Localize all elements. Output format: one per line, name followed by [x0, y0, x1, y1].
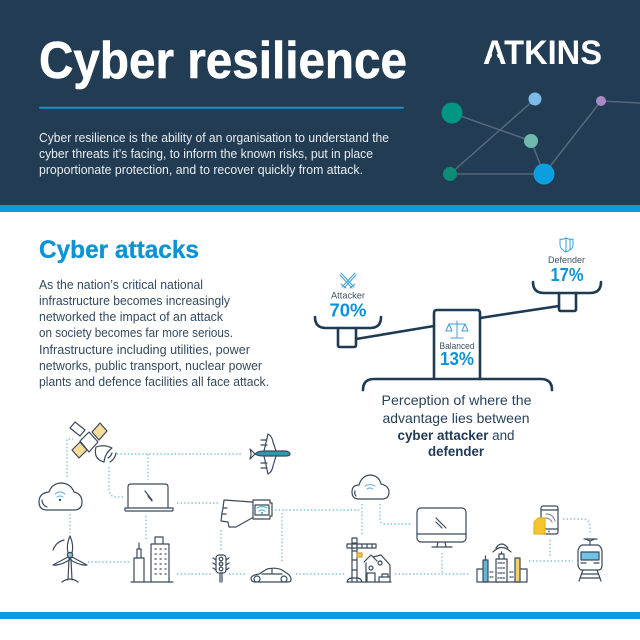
icon: traffic light	[213, 555, 229, 582]
icon: crane and houses	[347, 538, 391, 582]
defender: shield icon	[560, 238, 573, 252]
body text	[39, 278, 269, 389]
icon: train	[578, 539, 602, 581]
balanced value	[440, 341, 474, 369]
attacker value	[330, 290, 366, 320]
dotted connectors	[67, 439, 590, 574]
body text: networks, public transport, nuclear power	[39, 359, 262, 373]
scale caption: advantage lies between	[382, 410, 530, 426]
scale caption: Perception of where the	[382, 392, 532, 408]
attacker value: 70%	[330, 300, 366, 320]
defender value: 17%	[550, 265, 584, 285]
body text: networked the impact of an attack	[39, 310, 224, 324]
intro text: cyber threats it’s facing, to inform the known risks, put in place	[39, 147, 373, 161]
icon: smart city with wifi	[477, 544, 527, 582]
body text: As the nation’s critical national	[39, 278, 203, 292]
network diagram	[39, 422, 602, 582]
heading: Cyber attacks: Cyber attacks	[39, 236, 199, 264]
body text: on society becomes far more serious.	[39, 326, 233, 340]
defender value: Defender	[548, 255, 585, 266]
icon: city towers	[131, 537, 173, 582]
title: Cyber resilience	[39, 32, 407, 90]
body text: plants and defence facilities all face attack.	[39, 375, 269, 389]
balanced: scales icon	[446, 321, 468, 338]
balanced value: 13%	[440, 349, 474, 369]
icon: wind turbine	[53, 536, 87, 582]
panel: header	[0, 0, 640, 212]
icon: satellite	[70, 422, 116, 462]
balanced value: Balanced	[440, 341, 474, 352]
scale caption: cyber attacker and	[398, 427, 514, 443]
scale caption	[382, 392, 532, 459]
title rule	[39, 107, 404, 109]
body text: Infrastructure including utilities, power	[39, 343, 250, 357]
defender value	[548, 255, 585, 285]
intro text: Cyber resilience is the ability of an organisation to understand the	[39, 131, 389, 145]
attacker value: Attacker	[331, 290, 365, 302]
icon: smartphone and sim	[534, 506, 558, 534]
intro text: proportionate protection, and to recover quickly from attack.	[39, 163, 363, 177]
intro text	[39, 131, 389, 177]
network graphic	[442, 92, 640, 184]
icon: laptop	[125, 484, 173, 511]
attacker: swords icon	[340, 273, 356, 288]
scale caption: defender	[428, 443, 485, 459]
icon: cloud with wifi	[39, 483, 82, 510]
icon: desktop monitor	[417, 508, 466, 547]
icon: car	[251, 568, 291, 582]
bottom band	[0, 612, 640, 619]
chart: perception balance scale	[315, 238, 601, 459]
logo: Atkins: ATKINS	[483, 34, 602, 72]
scale structure	[315, 282, 601, 390]
icon: hand with smart watch	[221, 500, 272, 527]
body text: infrastructure becomes increasingly	[39, 294, 231, 308]
icon: airplane	[250, 434, 290, 474]
icon: cloud with wifi, small	[352, 475, 389, 499]
